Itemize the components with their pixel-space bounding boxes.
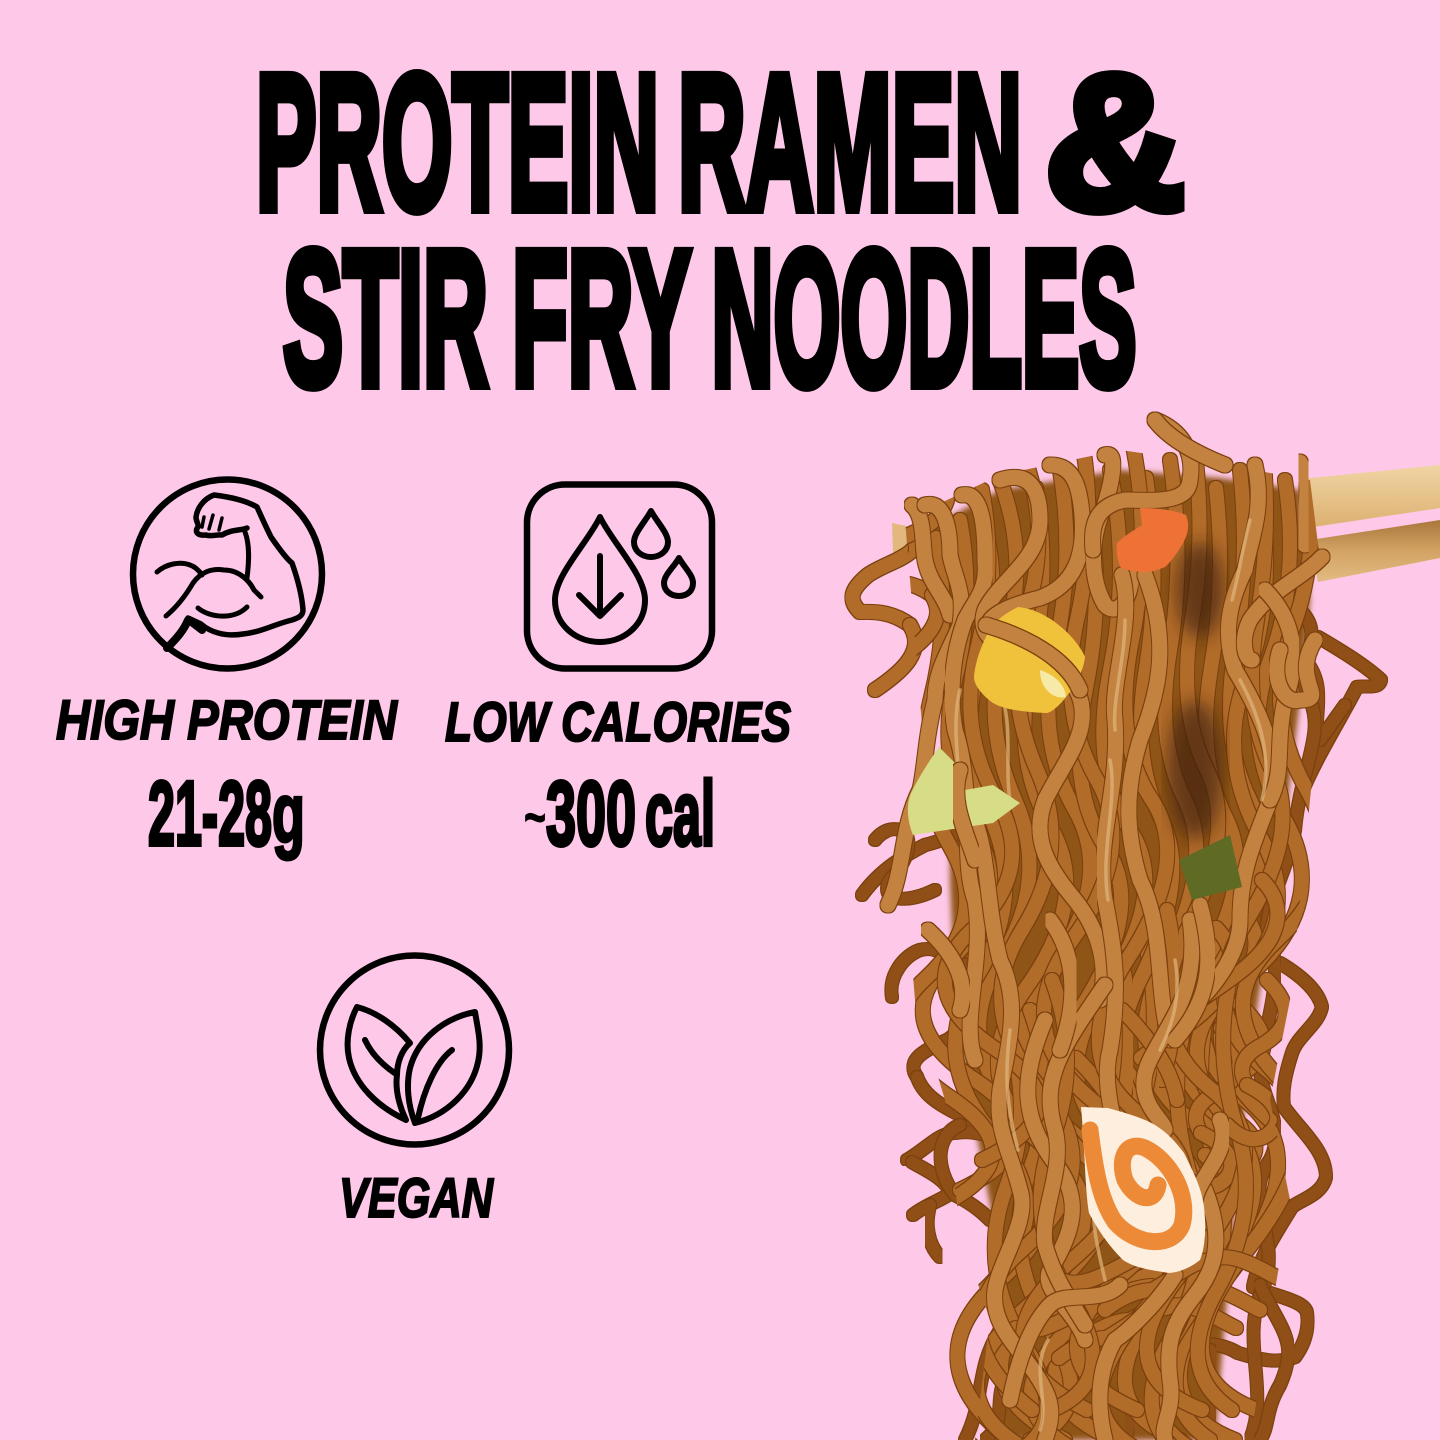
title xyxy=(256,34,1185,426)
cabbage piece xyxy=(908,747,1020,835)
value: 21-28g: 21-28 xyxy=(148,763,272,865)
chopsticks xyxy=(892,465,1440,582)
icon: droplets with down arrow xyxy=(527,484,712,668)
value: ~300 cal: cal xyxy=(645,763,715,865)
icon: flexed arm xyxy=(133,480,322,668)
label: vegan: VEGAN xyxy=(339,1166,494,1229)
carrot piece xyxy=(1117,508,1188,572)
extra strands for density xyxy=(881,450,1322,1440)
value: 21-28g xyxy=(148,763,305,865)
corn highlight xyxy=(1040,670,1066,698)
strand across corn xyxy=(986,625,1080,690)
label: low calories: LOW CALORIES xyxy=(445,690,791,753)
title: & xyxy=(1045,34,1185,250)
zucchini piece xyxy=(1179,835,1242,900)
panel: low calories xyxy=(445,484,791,865)
corn kernel xyxy=(974,607,1085,713)
value: ~300 cal: 300 xyxy=(546,763,636,865)
dark shadow pockets xyxy=(1167,542,1224,840)
noodle mass base xyxy=(925,470,1310,1440)
panel: high protein xyxy=(56,480,398,865)
middle noodle strands xyxy=(852,460,1302,1440)
title: RAMEN xyxy=(678,34,1022,250)
front noodle strands xyxy=(888,420,1322,1440)
icon: leaves xyxy=(320,956,509,1144)
narutomaki fishcake xyxy=(1081,1107,1205,1273)
value: 21-28g: g xyxy=(272,766,305,860)
back noodle strands xyxy=(862,610,1381,1440)
label: high protein: HIGH PROTEIN xyxy=(56,688,398,751)
value: ~300 cal: ~ xyxy=(524,785,546,848)
title: PROTEIN xyxy=(256,34,659,250)
noodle highlights xyxy=(956,520,1266,1430)
title: FRY xyxy=(512,210,691,426)
title: STIR xyxy=(283,210,488,426)
panel: vegan xyxy=(320,956,509,1229)
photo: noodles lifted by chopsticks xyxy=(828,420,1440,1440)
strand across cabbage xyxy=(957,770,975,860)
